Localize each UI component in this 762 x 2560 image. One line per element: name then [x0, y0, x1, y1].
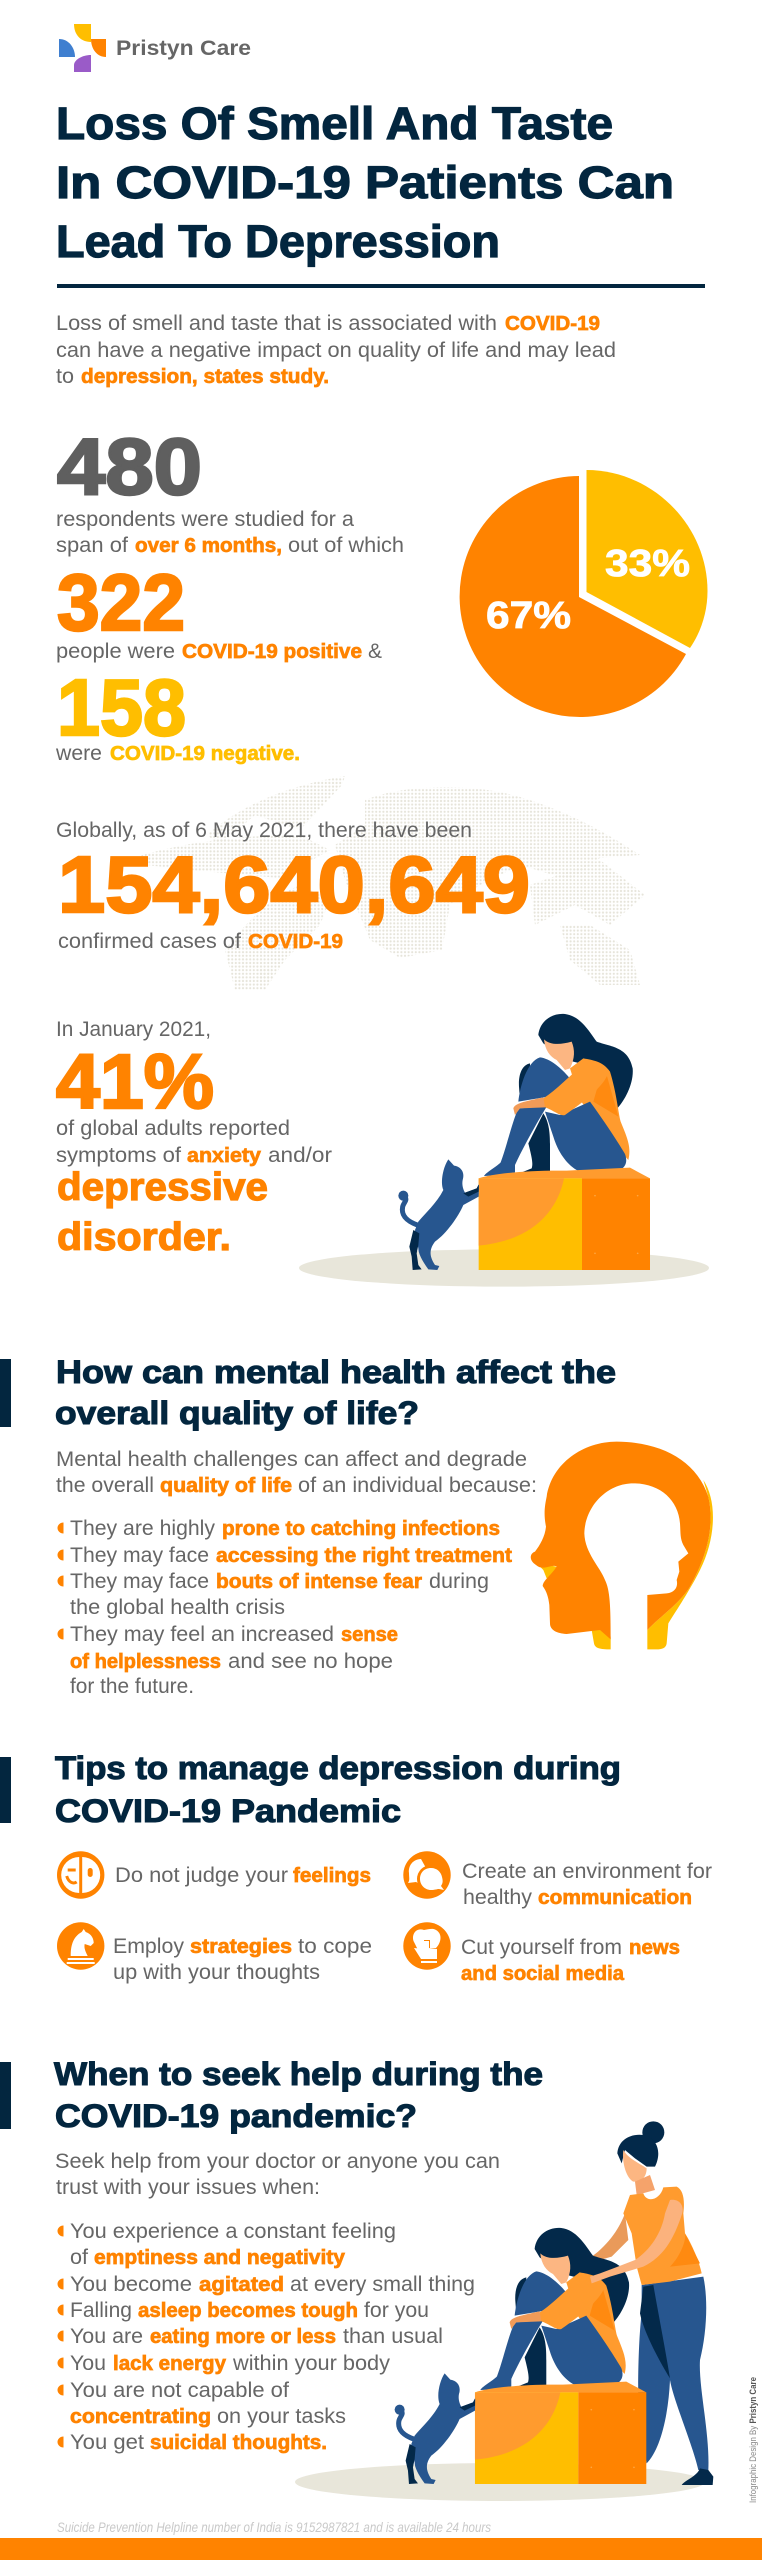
bullet list: when to seek help: You experience a constant feeling: [70, 2220, 396, 2243]
tip: strategies: up with your thoughts: [113, 1961, 320, 1984]
tip: communication: communication: [538, 1887, 692, 1909]
face: [544, 1039, 574, 1070]
tip: news and social media: Cut yourself from: [461, 1936, 622, 1959]
heading: when to seek help: COVID-19 pandemic?: [55, 2098, 417, 2134]
standing woman: [592, 2121, 713, 2485]
stat: 41% of adults: of global adults reported: [56, 1117, 290, 1140]
heading: mental health: How can mental health affect the: [56, 1354, 616, 1390]
logo mark: [59, 24, 106, 72]
stat: global confirmed cases: 154,640,649: [58, 840, 530, 929]
bullet list: when to seek help: within your body: [232, 2352, 391, 2375]
logo: Pristyn Care: [59, 24, 251, 72]
title: In COVID-19 Patients Can: [56, 157, 674, 208]
intro paragraph: can have a negative impact on quality of life and may lead: [56, 339, 616, 362]
bullet list: when to seek help: You get: [70, 2431, 144, 2454]
bullet list: when to seek help: You become: [70, 2273, 192, 2296]
illustration: woman comforting seated woman with cat: [295, 2121, 713, 2501]
heading: tips: [55, 1750, 621, 1829]
mental health intro text: Mental health challenges can affect and degrade: [56, 1448, 527, 1471]
bullet list: when to seek help: You are: [70, 2325, 143, 2348]
stat: 322 positive: [56, 558, 382, 663]
intro paragraph: depression, states study.: [81, 366, 329, 388]
logo wordmark: Pristyn Care: [116, 37, 251, 60]
dotted world map background: [120, 776, 645, 990]
hand: [513, 1097, 545, 1115]
tip: news and social media: [403, 1922, 680, 1985]
stat: 480 respondents: over 6 months,: [135, 535, 282, 557]
tip: communication: healthy: [463, 1886, 533, 1909]
stat: 41% of adults: depressive: [57, 1166, 268, 1209]
tip: communication: Create an environment for: [462, 1860, 712, 1883]
title: [56, 98, 674, 267]
legs: [484, 1057, 626, 1176]
credit: vertical text: Infographic Design By Pristyn Care: [748, 2377, 759, 2503]
footer helpline note: Suicide Prevention Helpline number of India is 9152987821 and is available 24 hours: [57, 2519, 491, 2535]
stat: 322 positive: &: [368, 640, 382, 663]
tip: strategies: strategies: [190, 1936, 292, 1958]
heading: tips: COVID-19 Pandemic: [55, 1793, 401, 1829]
stat: 480 respondents: [56, 422, 404, 557]
heading: when to seek help: When to seek help during the: [54, 2056, 543, 2092]
bullet list: when to seek help: Falling: [70, 2299, 132, 2322]
seated woman, box and cat: [395, 2228, 646, 2484]
seek help intro text: trust with your issues when:: [56, 2176, 320, 2199]
stat: 158 negative: [55, 663, 300, 765]
bullet list: when to seek help: concentrating: [70, 2406, 211, 2428]
pie chart: 67% / 33%: [460, 470, 708, 717]
bullet list: when to seek help: for you: [364, 2299, 429, 2322]
stat: 480 respondents: span of: [56, 534, 128, 557]
bullet list: mental health effects: sense: [341, 1624, 398, 1646]
bullet list: mental health effects: They may face: [70, 1570, 209, 1593]
bullet list: mental health effects: They are highly: [70, 1517, 216, 1540]
intro paragraph: COVID-19: [505, 313, 600, 335]
back leg: [519, 1063, 550, 1172]
stat: 480 respondents: out of which: [288, 534, 404, 557]
stat: 322 positive: COVID-19 positive: [182, 641, 362, 663]
ground shadow: [295, 2463, 705, 2501]
arm: [543, 1063, 608, 1115]
icon: speech bubbles: [403, 1851, 451, 1899]
stat: 480 respondents: respondents were studied for a: [56, 508, 354, 531]
stat: 41% of adults: [56, 1018, 332, 1259]
stat: 41% of adults: anxiety: [187, 1145, 262, 1167]
tip: news and social media: and social media: [461, 1963, 625, 1985]
tip: news and social media: news: [629, 1937, 680, 1959]
bullet list: when to seek help: asleep becomes tough: [138, 2300, 358, 2322]
bullet list: mental health effects: the global health crisis: [70, 1596, 285, 1619]
bullet list: when to seek help: agitated: [199, 2274, 284, 2296]
tip: strategies: to cope: [298, 1935, 372, 1958]
tip: feelings: [57, 1851, 371, 1899]
footer bar: [0, 2538, 762, 2560]
bullet list: when to seek help: on your tasks: [217, 2405, 346, 2428]
bullet list: mental health effects: during: [429, 1570, 489, 1593]
tip: communication: [403, 1851, 712, 1909]
intro paragraph: Loss of smell and taste that is associated with: [56, 312, 497, 335]
stat: 158 negative: COVID-19 negative.: [110, 743, 300, 765]
seek help intro text: Seek help from your doctor or anyone you can: [55, 2150, 500, 2173]
mental health intro text: of an individual because:: [298, 1474, 537, 1497]
heading: mental health: [55, 1354, 616, 1431]
stat: global confirmed cases: [56, 819, 530, 953]
stat: 158 negative: were: [55, 742, 102, 765]
bullet list: when to seek help: [58, 2220, 475, 2454]
bullet list: mental health effects: [58, 1517, 512, 1698]
intro paragraph: to: [56, 365, 74, 388]
heading: when to seek help: [54, 2056, 543, 2134]
stat: 480 respondents: 480: [57, 422, 202, 511]
bullet list: mental health effects: for the future.: [70, 1675, 194, 1698]
tip: strategies: [57, 1922, 372, 1984]
mental health intro text: quality of life: [160, 1475, 292, 1497]
bullet list: when to seek help: You: [70, 2352, 106, 2375]
stat: global confirmed cases: COVID-19: [248, 931, 343, 953]
box: [479, 1168, 650, 1270]
ground shadow: [299, 1249, 709, 1287]
stat: 41% of adults: symptoms of: [56, 1144, 181, 1167]
tip: strategies: Employ: [113, 1935, 184, 1958]
mental health intro text: the overall: [56, 1474, 154, 1497]
seek help intro text: [55, 2150, 500, 2199]
icon: two faces: [57, 1851, 104, 1899]
title: Loss Of Smell And Taste: [56, 98, 613, 149]
comforting arm: [590, 2200, 683, 2283]
bullet list: when to seek help: lack energy: [113, 2353, 227, 2375]
bullet list: when to seek help: than usual: [343, 2325, 443, 2348]
icon: chess knight: [57, 1922, 104, 1970]
heading: tips: Tips to manage depression during: [55, 1750, 621, 1786]
pie chart: 67% / 33%: 33%: [605, 543, 690, 585]
hair: [538, 1014, 633, 1108]
bullet list: when to seek help: emptiness and negativity: [94, 2247, 346, 2269]
bullet list: when to seek help: at every small thing: [290, 2273, 475, 2296]
section bar: [0, 2062, 11, 2129]
stat: 158 negative: 158: [57, 663, 186, 752]
stat: 41% of adults: and/or: [268, 1144, 332, 1167]
stat: global confirmed cases: Globally, as of 6 May 2021, there have been: [56, 819, 472, 842]
torso: [570, 1058, 629, 1160]
bullet list: when to seek help: eating more or less: [150, 2326, 336, 2348]
stat: 41% of adults: disorder.: [57, 1216, 231, 1259]
bullet list: mental health effects: They may feel an increased: [70, 1623, 334, 1646]
illustration: head silhouette: [531, 1442, 713, 1649]
bullet list: mental health effects: bouts of intense fear: [216, 1571, 422, 1593]
bullet list: when to seek help: You are not capable of: [70, 2379, 289, 2402]
section bar: [0, 1359, 11, 1427]
section bar: [0, 1757, 11, 1823]
stat: 322 positive: people were: [56, 640, 175, 663]
bullet list: mental health effects: and see no hope: [228, 1650, 393, 1673]
title: Lead To Depression: [56, 216, 500, 267]
tip: feelings: Do not judge your: [115, 1864, 288, 1887]
pie chart: 67% / 33%: 67%: [486, 595, 571, 637]
bullet list: mental health effects: prone to catching infections: [222, 1518, 500, 1540]
stat: 41% of adults: 41%: [56, 1039, 214, 1125]
bullet list: mental health effects: of helplessness: [70, 1651, 221, 1673]
illustration: sad woman on box with cat: [299, 1014, 709, 1287]
stat: global confirmed cases: confirmed cases of: [58, 930, 241, 953]
bullet list: when to seek help: of: [70, 2246, 88, 2269]
stat: 322 positive: 322: [57, 558, 185, 647]
bullet list: mental health effects: They may face: [70, 1544, 209, 1567]
bullet list: when to seek help: suicidal thoughts.: [150, 2432, 327, 2454]
stat: 41% of adults: In January 2021,: [56, 1018, 211, 1041]
tip: feelings: feelings: [293, 1865, 371, 1887]
icon: hand tapping: [403, 1922, 451, 1970]
intro paragraph: [56, 312, 616, 388]
cat: [398, 1159, 479, 1270]
bullet list: mental health effects: accessing the right treatment: [216, 1545, 512, 1567]
heading: mental health: overall quality of life?: [55, 1395, 419, 1431]
mental health intro text: [56, 1448, 537, 1497]
